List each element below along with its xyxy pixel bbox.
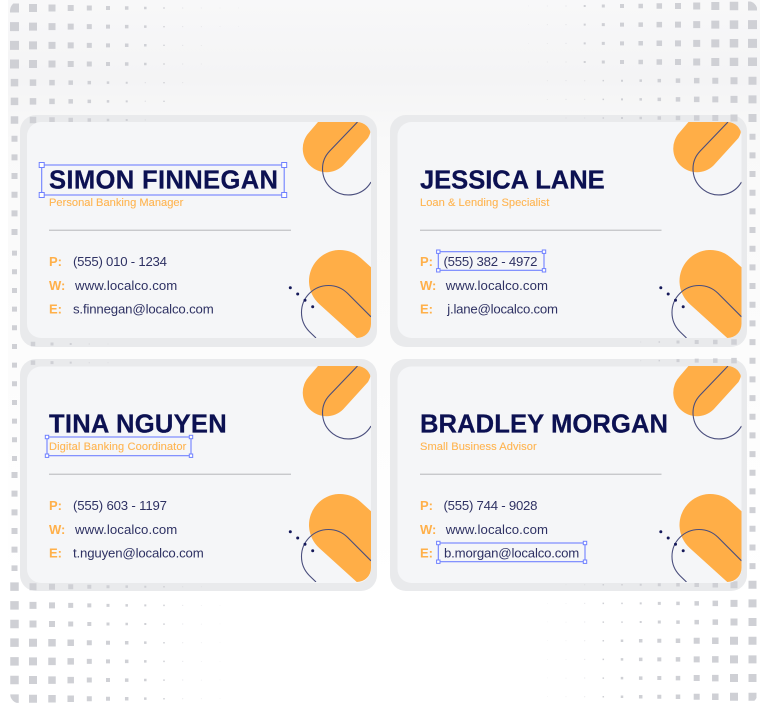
panel: business card Bradley Morgan: E: (420, 546, 433, 560)
panel: business card Simon Finnegan: s.finnegan@localco.com (73, 302, 214, 316)
panel: business card Jessica Lane (398, 122, 768, 348)
panel: business card Jessica Lane: JESSICA LANE (420, 166, 605, 194)
panel: business card Simon Finnegan: E: (49, 302, 62, 316)
panel: business card Bradley Morgan: b.morgan@localco.com (444, 546, 579, 560)
panel: business card Jessica Lane: (555) 382 - 4972 (444, 254, 538, 269)
panel: business card Simon Finnegan: P: (49, 254, 62, 269)
panel: business card Bradley Morgan: P: (420, 498, 433, 513)
panel: business card Jessica Lane: E: (420, 302, 433, 316)
panel: business card Simon Finnegan (27, 122, 414, 348)
panel: business card Tina Nguyen: P: (49, 498, 62, 513)
panel: business card Simon Finnegan: W: (49, 278, 65, 293)
panel: business card Tina Nguyen: (555) 603 - 1197 (73, 498, 167, 513)
card frames (20, 115, 747, 591)
panel: business card Simon Finnegan: www.localco.com (74, 278, 177, 293)
panel: business card Simon Finnegan: SIMON FINNEGAN (49, 166, 278, 194)
panel: business card Jessica Lane: www.localco.com (445, 278, 548, 293)
panel: business card Tina Nguyen: t.nguyen@localco.com (73, 546, 204, 560)
panel: business card Jessica Lane: Loan & Lending Specialist (420, 197, 549, 209)
panel: business card Bradley Morgan: www.localco.com (445, 522, 548, 537)
panel: business card Bradley Morgan: W: (420, 522, 436, 537)
selection box: name (39, 162, 287, 198)
panel: business card Tina Nguyen: W: (49, 522, 65, 537)
panel: business card Jessica Lane: W: (420, 278, 436, 293)
panel: business card Jessica Lane: P: (420, 254, 433, 269)
panel: business card Tina Nguyen: TINA NGUYEN (49, 410, 227, 438)
panel: business card Bradley Morgan: BRADLEY MORGAN (420, 410, 668, 438)
panel: business card Bradley Morgan: (555) 744 - 9028 (444, 498, 538, 513)
panel: business card Tina Nguyen: www.localco.com (74, 522, 177, 537)
panel: business card Simon Finnegan: Personal Banking Manager (49, 197, 184, 209)
selection box: email (437, 541, 587, 563)
panel: business card Tina Nguyen: E: (49, 546, 62, 560)
panel: business card Tina Nguyen (27, 366, 414, 592)
panel: business card Tina Nguyen: Digital Banking Coordinator (49, 441, 187, 453)
panel: business card Jessica Lane: j.lane@localco.com (446, 302, 558, 316)
panel: business card Bradley Morgan: Small Business Advisor (420, 441, 537, 453)
selection box: job title (45, 435, 193, 457)
selection box: phone (437, 250, 546, 272)
panel: business card Simon Finnegan: (555) 010 - 1234 (73, 254, 167, 269)
panel: business card Bradley Morgan (398, 366, 768, 592)
